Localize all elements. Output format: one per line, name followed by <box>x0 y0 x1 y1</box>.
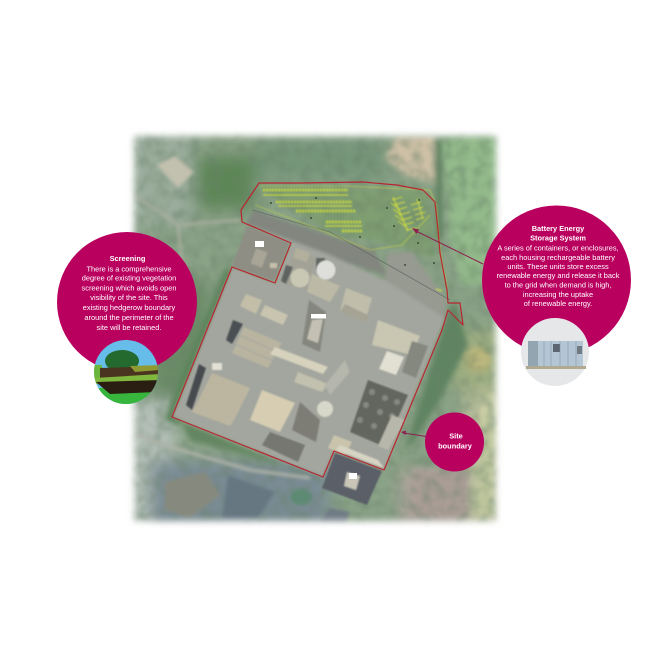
aerial site map <box>125 125 505 535</box>
turbine hall top <box>232 327 282 368</box>
text block: screening description: screening which avoids open <box>82 284 176 292</box>
text block: screening description <box>82 264 176 332</box>
text block: screening description: site will be retained. <box>97 323 161 332</box>
roads, concrete pad and yards <box>133 156 446 525</box>
cooling towers and roofs <box>284 250 316 290</box>
text block: battery description: to the grid when demand is high, <box>505 280 611 290</box>
text block: battery description: units. These units store excess <box>507 262 609 271</box>
heading: screening: Screening <box>110 254 146 263</box>
text block: screening description: degree of existing vegetation <box>82 274 176 282</box>
text block: battery description: of renewable energy. <box>524 299 592 308</box>
east buildings <box>372 320 420 355</box>
white label markers on map <box>255 241 357 479</box>
callout: battery energy storage system <box>482 206 631 354</box>
plant ground <box>172 222 445 477</box>
text block: battery description: renewable energy and release it back <box>497 271 620 280</box>
central stack <box>302 300 326 352</box>
site boundary outline <box>172 182 463 477</box>
text block: screening description: around the perimeter of the <box>84 313 174 322</box>
substation compound <box>232 226 289 281</box>
callout: site boundary <box>425 412 484 472</box>
yellow BESS layout <box>255 186 447 291</box>
vegetation texture <box>125 125 505 535</box>
arrow: site boundary callout to boundary line <box>401 430 426 436</box>
heading: battery energy storage system: Storage System <box>530 234 586 242</box>
text block: battery description: each housing rechargeable battery <box>501 253 615 262</box>
callout: screening <box>57 232 197 372</box>
text block: screening description: There is a comprehensive <box>86 264 172 274</box>
dark tree dots <box>270 197 435 266</box>
text block: screening description: existing hedgerow boundary <box>83 303 176 312</box>
text block: battery description: A series of containers, or enclosures, <box>497 244 619 252</box>
text block: battery description: increasing the uptake <box>523 290 593 299</box>
text block: battery description <box>497 244 620 308</box>
north fence line <box>252 210 450 300</box>
arrow: BESS callout to battery area <box>412 228 483 264</box>
fields and sand patch <box>164 135 500 518</box>
top-left concrete pad <box>157 156 194 188</box>
text block: screening description: visibility of the site. This <box>90 293 168 302</box>
south substation <box>322 453 382 505</box>
callout: site boundary: boundary <box>438 442 473 450</box>
plant buildings <box>186 226 428 505</box>
icon: hedgerow illustration <box>94 340 158 404</box>
callout: site boundary: Site <box>449 432 463 440</box>
parking area <box>385 252 446 318</box>
heading: battery energy storage system <box>530 224 586 242</box>
asphalt strip north of plant <box>246 210 388 276</box>
heading: battery energy storage system: Battery Energy <box>532 224 585 233</box>
transformer yard <box>350 380 408 447</box>
south turbine hall <box>186 364 206 410</box>
icon: battery container unit <box>521 318 589 386</box>
bottom-left woodland and works <box>153 440 311 481</box>
base ground and vegetation <box>125 125 505 535</box>
